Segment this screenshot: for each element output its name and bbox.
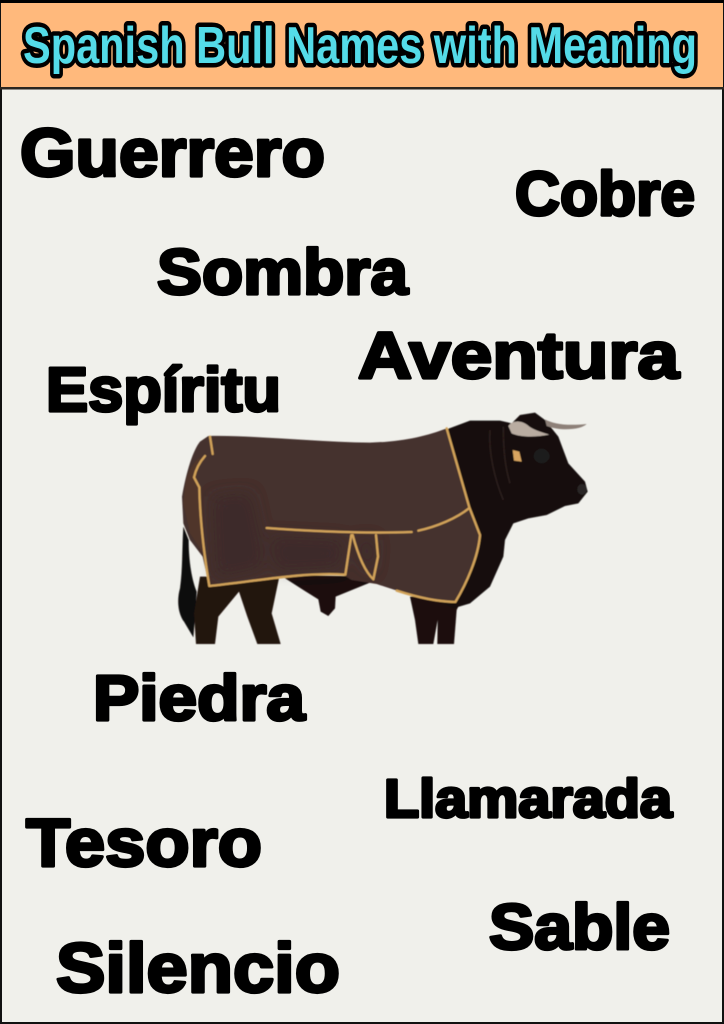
name: Sombra: Sombra bbox=[157, 236, 408, 308]
brown blanket bbox=[182, 428, 480, 602]
name: Guerrero: Guerrero bbox=[20, 115, 325, 191]
name: Espíritu: Espíritu bbox=[46, 356, 281, 425]
name: Piedra: Piedra bbox=[93, 662, 305, 734]
blanket shading bbox=[213, 493, 375, 577]
name: Cobre: Cobre bbox=[515, 160, 695, 229]
blanket gold trim bbox=[194, 428, 480, 602]
name: Sable: Sable bbox=[489, 891, 670, 963]
bull neck and head bbox=[437, 413, 588, 608]
name: Llamarada: Llamarada bbox=[384, 769, 673, 829]
bull illustration bbox=[178, 413, 588, 644]
name: Silencio: Silencio bbox=[56, 929, 340, 1007]
bull ear tag bbox=[513, 450, 522, 462]
blanket hind fold bbox=[183, 457, 203, 553]
bull tail bbox=[178, 527, 197, 637]
bull far horn bbox=[545, 419, 587, 429]
name: Aventura: Aventura bbox=[358, 318, 680, 392]
bull muzzle bbox=[577, 484, 587, 495]
bull front legs bbox=[410, 597, 463, 644]
bull belly and sheath bbox=[280, 575, 383, 616]
bull neck wrinkles bbox=[490, 427, 510, 500]
bull hind legs bbox=[194, 577, 281, 644]
title banner bbox=[0, 0, 724, 90]
bull near horn bbox=[508, 422, 549, 437]
bull eye bbox=[534, 449, 550, 463]
name: Tesoro: Tesoro bbox=[26, 805, 262, 881]
